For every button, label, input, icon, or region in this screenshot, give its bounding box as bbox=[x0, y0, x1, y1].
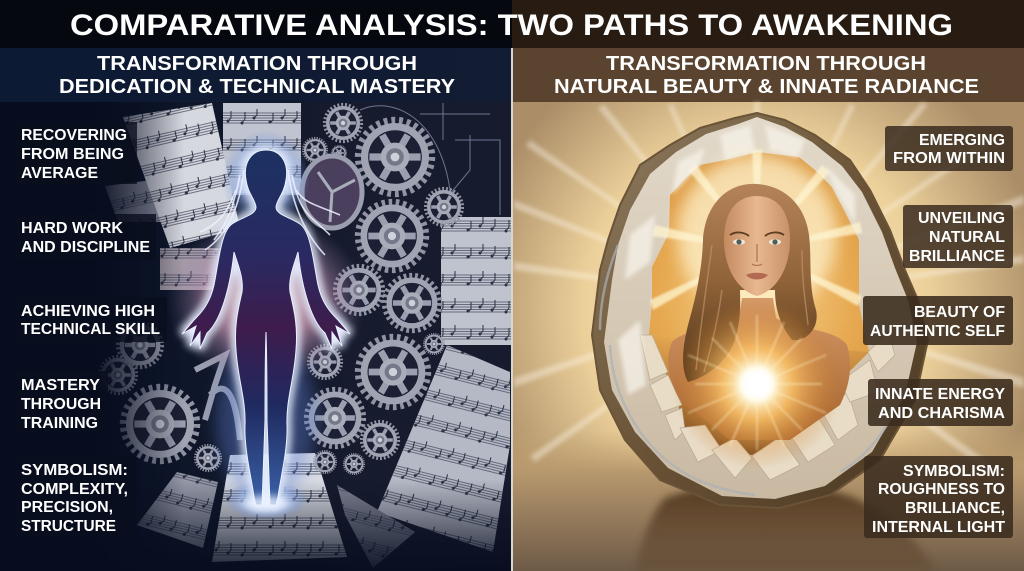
geode: inner cavity bbox=[649, 152, 869, 455]
callout: unveiling natural brilliance: NATURAL bbox=[929, 229, 1005, 246]
header band: left bbox=[0, 48, 512, 102]
divider between panels bbox=[511, 48, 513, 571]
callout: recovering from being average bbox=[14, 122, 137, 184]
heading: right panel: NATURAL BEAUTY & INNATE RADIANCE bbox=[554, 76, 979, 98]
callout: innate energy and charisma bbox=[868, 379, 1013, 426]
figure: luminous silhouette bbox=[182, 150, 350, 505]
callout: emerging from within: EMERGING bbox=[919, 132, 1005, 149]
callout: achieving high technical skill: TECHNICAL SKILL bbox=[21, 321, 160, 338]
geode: crystal facets bbox=[640, 332, 895, 480]
callout: symbolism, complexity, precision, structure bbox=[14, 456, 136, 537]
callout: mastery through training bbox=[14, 371, 108, 434]
light rays bbox=[514, 102, 1024, 470]
callout: beauty of authentic self bbox=[863, 296, 1013, 345]
callout: symbolism, roughness to brilliance, internal light bbox=[864, 456, 1013, 538]
callout: mastery through training: THROUGH bbox=[21, 396, 101, 413]
callout: recovering from being average: AVERAGE bbox=[21, 165, 98, 182]
figure outline glow bbox=[182, 150, 350, 505]
callout: symbolism, complexity, precision, structure: STRUCTURE bbox=[21, 518, 116, 535]
floor gradient bbox=[512, 430, 1024, 571]
woman: torso bbox=[668, 298, 850, 440]
callout: emerging from within bbox=[885, 126, 1013, 171]
geode: agate band and rock streaks bbox=[600, 245, 905, 495]
callout: symbolism, roughness to brilliance, internal light: ROUGHNESS TO bbox=[878, 481, 1005, 498]
header band: right bbox=[512, 48, 1024, 102]
heading: left panel: TRANSFORMATION THROUGH bbox=[97, 53, 417, 75]
callout: symbolism, roughness to brilliance, internal light: INTERNAL LIGHT bbox=[872, 519, 1005, 536]
illustration: gears bbox=[100, 105, 462, 474]
geode: cavity lower shading bbox=[649, 335, 869, 455]
figure: central light line bbox=[264, 332, 268, 500]
geode: crystal texture top bbox=[618, 125, 855, 395]
panel: right, natural beauty and innate radiance bbox=[512, 48, 1024, 571]
callout: unveiling natural brilliance: UNVEILING bbox=[918, 210, 1005, 227]
woman: eyebrows and eyes bbox=[730, 232, 784, 245]
woman: portrait bbox=[668, 184, 850, 440]
figure: feet glow bbox=[242, 496, 290, 510]
title: COMPARATIVE ANALYSIS: TWO PATHS TO AWAKENING bbox=[70, 9, 953, 42]
illustration: sheet music pages bbox=[105, 103, 512, 568]
glow around woman bbox=[677, 155, 837, 315]
geode: cavity light rays bbox=[650, 150, 862, 310]
heading: left panel: DEDICATION & TECHNICAL MASTERY bbox=[59, 76, 456, 98]
heading: right panel bbox=[554, 53, 979, 98]
vertical ray over geode crown bbox=[754, 104, 760, 165]
callout: recovering from being average: FROM BEING bbox=[21, 146, 124, 163]
glow behind figure bbox=[166, 130, 366, 520]
callout: beauty of authentic self: BEAUTY OF bbox=[914, 304, 1005, 321]
geode: crystal ring bbox=[604, 117, 917, 499]
callout: emerging from within: FROM WITHIN bbox=[893, 150, 1005, 167]
callout: beauty of authentic self: AUTHENTIC SELF bbox=[870, 323, 1005, 340]
callout: innate energy and charisma: AND CHARISMA bbox=[878, 405, 1005, 422]
callout: recovering from being average: RECOVERING bbox=[21, 127, 127, 144]
woman: hair strands bbox=[696, 245, 808, 372]
fades over the illustration bbox=[0, 102, 512, 571]
flowing hair lines bbox=[200, 170, 340, 255]
title bar bbox=[0, 0, 1024, 48]
callout: hard work and discipline: HARD WORK bbox=[21, 220, 123, 237]
callout: achieving high technical skill bbox=[14, 297, 167, 342]
callout: unveiling natural brilliance bbox=[903, 205, 1013, 268]
chest star light bbox=[672, 299, 842, 469]
illustration: blueprint lines bbox=[360, 103, 500, 215]
callout: unveiling natural brilliance: BRILLIANCE bbox=[909, 248, 1005, 265]
callout: mastery through training: MASTERY bbox=[21, 377, 100, 394]
woman: face bbox=[724, 196, 790, 296]
callout: symbolism, complexity, precision, structure: PRECISION, bbox=[21, 499, 113, 516]
geode: rough outer rock bbox=[592, 113, 928, 508]
heading: left panel bbox=[59, 53, 456, 98]
woman: nose bbox=[752, 244, 762, 266]
callout: symbolism, roughness to brilliance, internal light: BRILLIANCE, bbox=[905, 500, 1005, 517]
callout: hard work and discipline bbox=[14, 214, 156, 260]
shadow under geode bbox=[635, 483, 935, 571]
callout: hard work and discipline: AND DISCIPLINE bbox=[21, 239, 150, 256]
callout: innate energy and charisma: INNATE ENERGY bbox=[875, 386, 1005, 403]
callout: symbolism, roughness to brilliance, internal light: SYMBOLISM: bbox=[903, 463, 1005, 480]
callout: symbolism, complexity, precision, structure: COMPLEXITY, bbox=[21, 481, 128, 498]
callout: achieving high technical skill: ACHIEVING HIGH bbox=[21, 303, 155, 320]
callout: mastery through training: TRAINING bbox=[21, 415, 98, 432]
woman: lips bbox=[746, 273, 768, 280]
heading: right panel: TRANSFORMATION THROUGH bbox=[606, 53, 926, 75]
woman: hair bbox=[683, 184, 817, 382]
callout: symbolism, complexity, precision, structure: SYMBOLISM: bbox=[21, 462, 128, 479]
panel: left, dedication and technical mastery bbox=[0, 48, 512, 571]
